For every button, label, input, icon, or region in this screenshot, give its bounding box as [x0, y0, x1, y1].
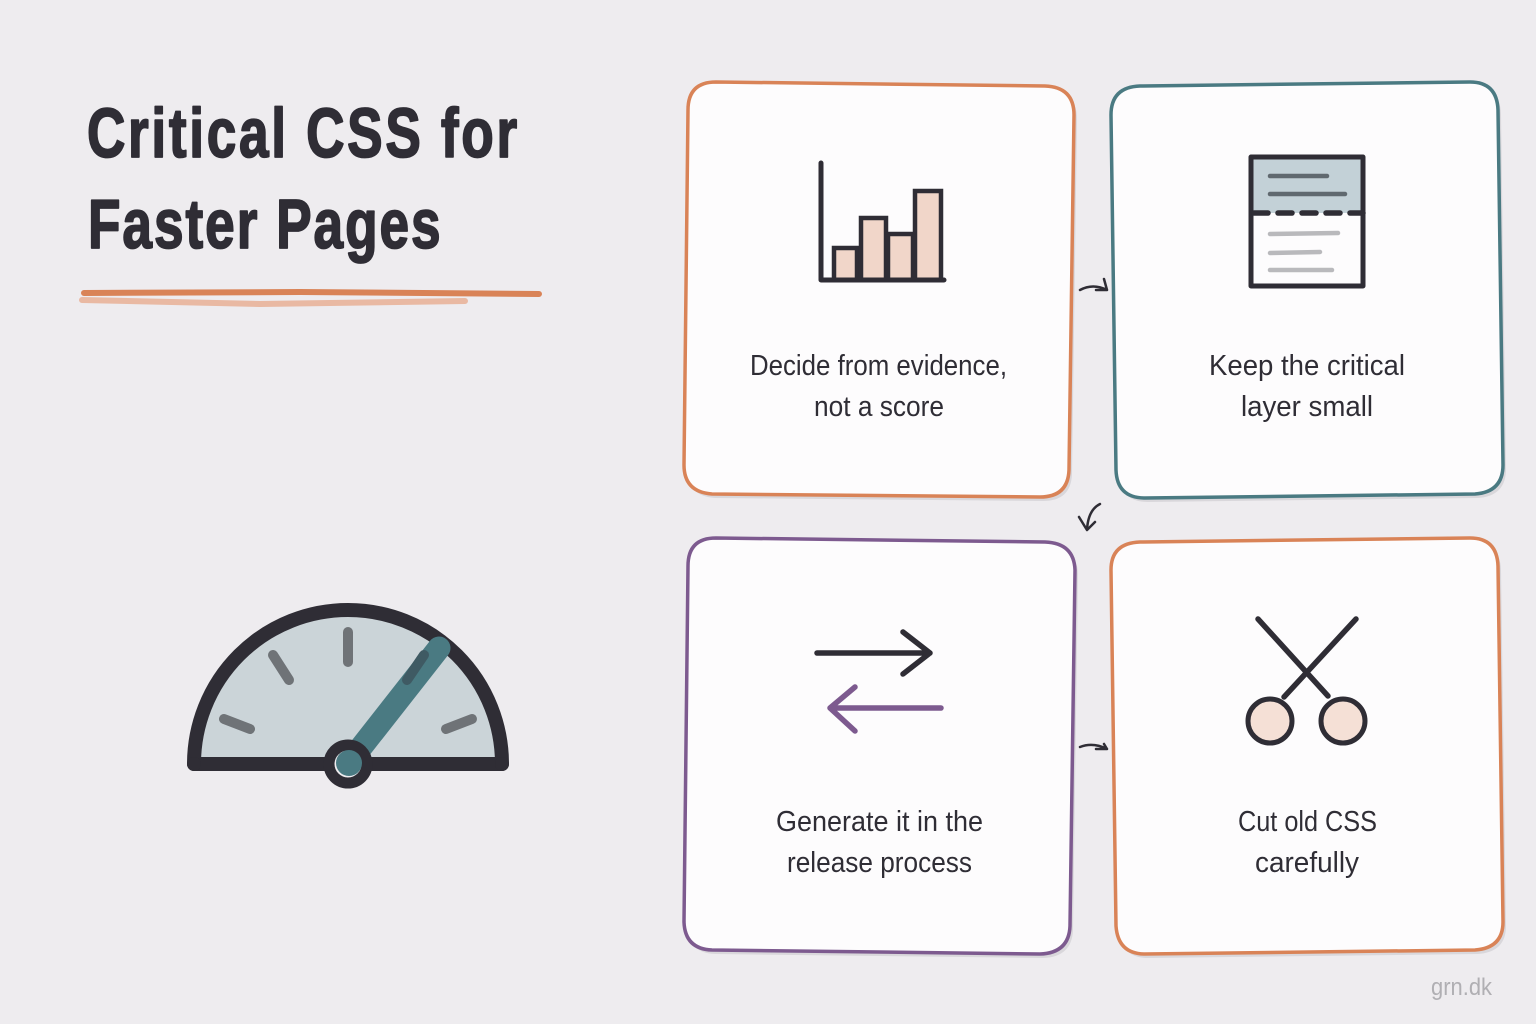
panel: keep critical layer small [1111, 82, 1506, 502]
icon: two-way arrows [817, 632, 941, 731]
card text: release process [787, 847, 972, 879]
card text: not a score [814, 391, 944, 423]
card text: Generate it in the [776, 806, 983, 838]
card text [776, 806, 983, 879]
panel: decide from evidence [684, 82, 1077, 501]
title: Faster Pages [88, 186, 441, 264]
title [87, 95, 517, 264]
card text: Keep the critical [1209, 350, 1405, 382]
card text [750, 350, 1007, 423]
icon: bar chart [821, 163, 944, 280]
panel: cut old css [1111, 538, 1506, 958]
card text [1238, 806, 1377, 879]
title: Critical CSS for [87, 95, 517, 173]
icon: document with fold line [1251, 157, 1363, 286]
arrow: card 3 to card 4 [1080, 744, 1107, 749]
card text: Decide from evidence, [750, 350, 1007, 382]
card text: carefully [1255, 847, 1359, 879]
watermark: grn.dk [1431, 974, 1493, 1001]
icon: speedometer gauge [187, 610, 509, 783]
icon: scissors [1248, 619, 1365, 743]
title underline [82, 292, 539, 304]
card text [1209, 350, 1405, 423]
card text: Cut old CSS [1238, 806, 1377, 838]
arrow: card 2 to card 3 [1079, 504, 1100, 530]
panel: generate in release process [684, 538, 1078, 958]
arrow: card 1 to card 2 [1080, 279, 1107, 290]
card text: layer small [1241, 391, 1373, 423]
